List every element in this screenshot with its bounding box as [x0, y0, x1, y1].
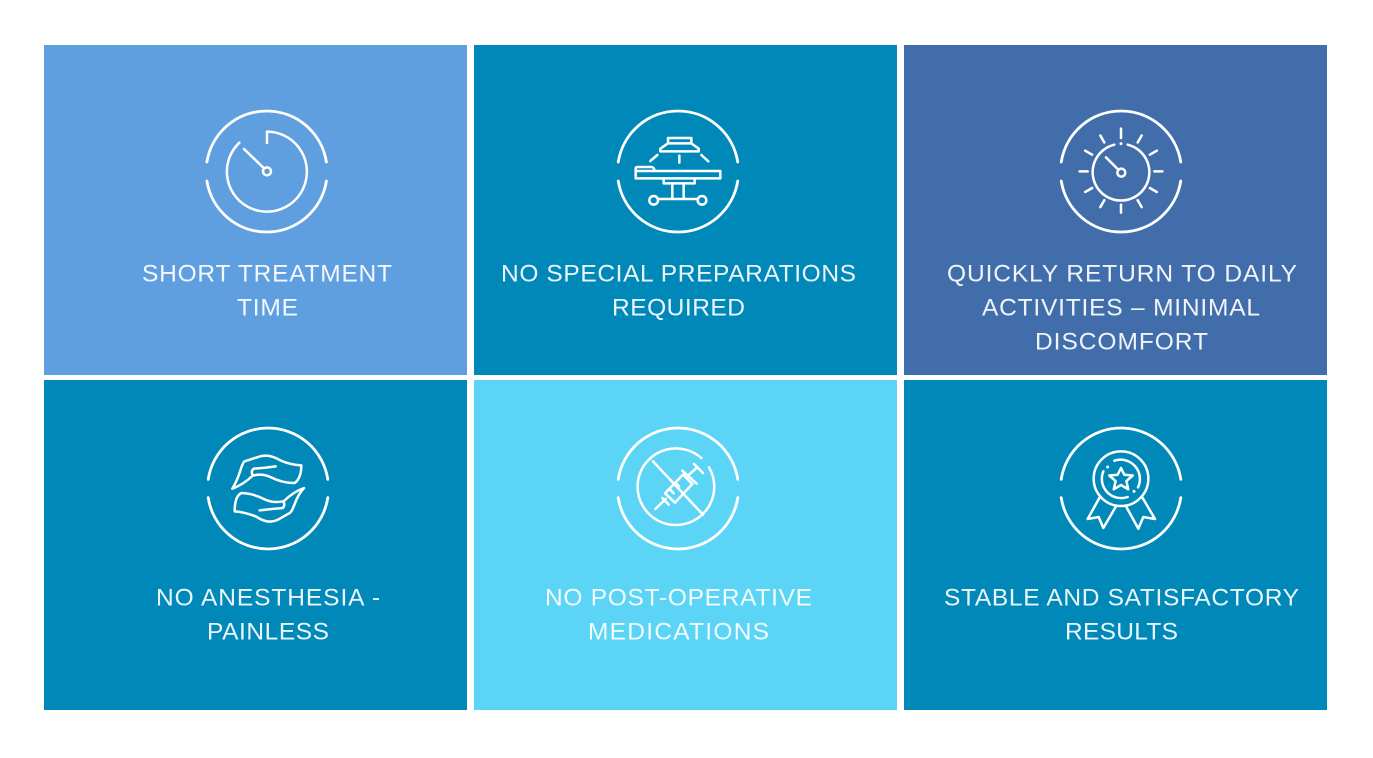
- panel: no special preparations: [474, 45, 897, 375]
- heading: no special preparations: NO SPECIAL PREPARATIONS: [501, 260, 856, 288]
- heading: short treatment time: SHORT TREATMENT: [142, 260, 392, 288]
- panel: no post-operative medications: [474, 380, 897, 710]
- icon: crossed-out syringe: [618, 428, 738, 549]
- icon: gauge with sun rays: [1061, 111, 1181, 232]
- heading: no anesthesia painless: NO ANESTHESIA -: [156, 584, 380, 612]
- heading: quickly return to daily activities: [947, 260, 1297, 356]
- heading: quickly return to daily activities: ACTIVITIES – MINIMAL: [982, 294, 1260, 322]
- heading: no special preparations: REQUIRED: [612, 294, 745, 322]
- panel: stable and satisfactory results: [904, 380, 1327, 710]
- heading: quickly return to daily activities: DISCOMFORT: [1035, 328, 1208, 356]
- panel: no anesthesia: [44, 380, 467, 710]
- heading: stable and satisfactory results: [944, 584, 1299, 646]
- heading: no post-operative medications: MEDICATIONS: [588, 618, 769, 646]
- heading: quickly return to daily activities: QUICKLY RETURN TO DAILY: [947, 260, 1297, 288]
- heading: no anesthesia painless: PAINLESS: [207, 618, 329, 646]
- heading: stable and satisfactory results: RESULTS: [1065, 618, 1178, 646]
- heading: stable and satisfactory results: STABLE AND SATISFACTORY: [944, 584, 1299, 612]
- heading: no anesthesia painless: [156, 584, 380, 646]
- panel: short treatment time: [44, 45, 467, 375]
- icon: stopwatch dial: [207, 111, 326, 232]
- heading: short treatment time: [142, 260, 392, 322]
- heading: short treatment time: TIME: [237, 294, 298, 322]
- panel: quick return to daily activities: [904, 45, 1327, 375]
- heading: no post-operative medications: NO POST-OPERATIVE: [545, 584, 812, 612]
- icon: award rosette with star: [1061, 428, 1181, 549]
- heading: no post-operative medications: [545, 584, 812, 646]
- icon: operating table with lamp: [618, 111, 738, 232]
- heading: no special preparations: [501, 260, 856, 322]
- icon: caring hands: [208, 428, 328, 549]
